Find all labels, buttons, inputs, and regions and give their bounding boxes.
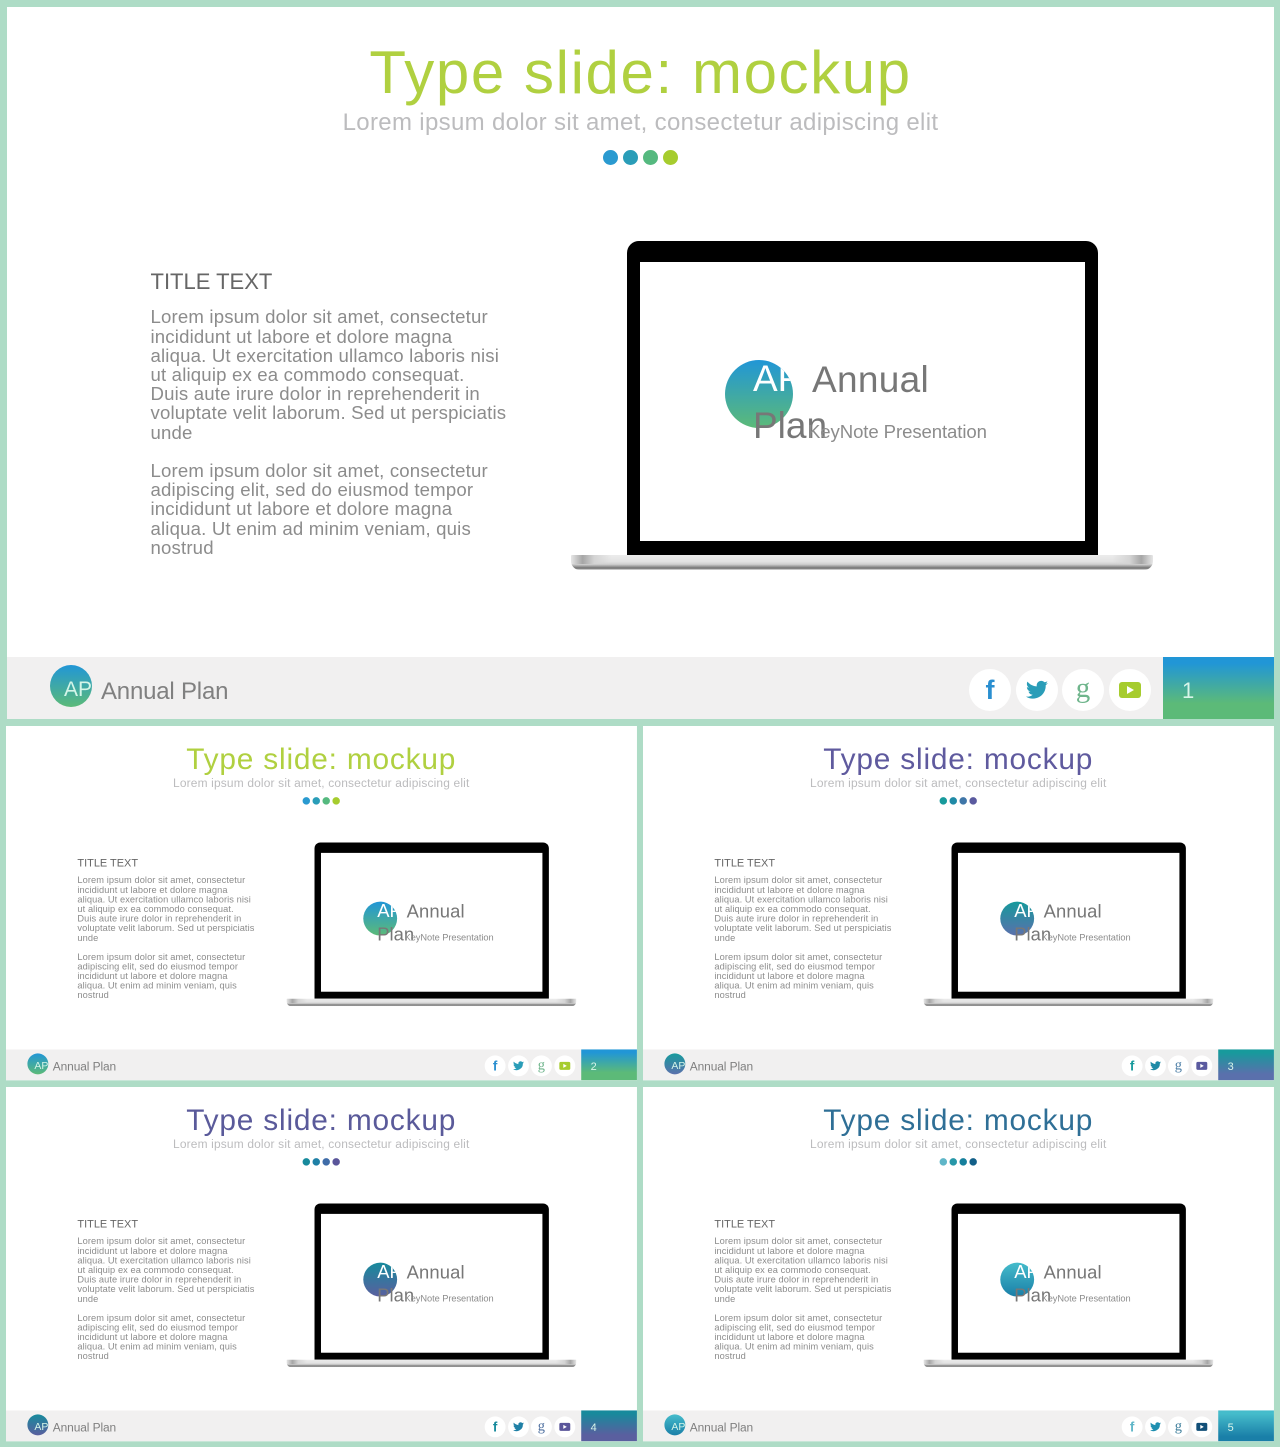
body text: ut aliquip ex ea commodo consequat. bbox=[77, 1264, 234, 1275]
dots bbox=[302, 797, 340, 805]
footer bar: 1 bbox=[1182, 678, 1194, 703]
body text: adipiscing elit, sed do eiusmod tempor bbox=[150, 479, 473, 500]
body text: aliqua. Ut enim ad minim veniam, quis bbox=[714, 1341, 874, 1351]
body text: Lorem ipsum dolor sit amet, consectetur bbox=[150, 306, 488, 327]
title: Type slide: mockup bbox=[186, 1103, 456, 1136]
body text bbox=[77, 1236, 254, 1361]
body text: Lorem ipsum dolor sit amet, consectetur bbox=[77, 951, 245, 961]
laptop mockup: KeyNote Presentation bbox=[1042, 1293, 1131, 1303]
body text: incididunt ut labore et dolore magna bbox=[150, 326, 452, 347]
body text: adipiscing elit, sed do eiusmod tempor bbox=[77, 1322, 238, 1332]
footer bar: g bbox=[1076, 672, 1090, 704]
laptop mockup: KeyNote Presentation bbox=[1042, 932, 1131, 942]
body text: unde bbox=[77, 1293, 98, 1303]
body text: aliqua. Ut exercitation ullamco laboris nisi bbox=[714, 1255, 888, 1265]
footer bar: AP bbox=[34, 1420, 48, 1432]
text heading: TITLE TEXT bbox=[77, 856, 138, 868]
body text: incididunt ut labore et dolore magna bbox=[150, 498, 452, 519]
title: Type slide: mockup bbox=[823, 742, 1093, 775]
body text: voluptate velit laborum. Sed ut perspiciatis bbox=[150, 402, 506, 423]
body text: Lorem ipsum dolor sit amet, consectetur bbox=[150, 460, 488, 481]
dots bbox=[940, 1158, 977, 1166]
footer bar: f bbox=[1130, 1058, 1134, 1073]
body text: aliqua. Ut exercitation ullamco laboris nisi bbox=[77, 1255, 251, 1265]
body text: aliqua. Ut enim ad minim veniam, quis bbox=[77, 1341, 237, 1351]
slide 2: small green mockup slide bbox=[6, 726, 637, 1080]
text heading: TITLE TEXT bbox=[714, 1217, 775, 1229]
laptop mockup: KeyNote Presentation bbox=[405, 932, 494, 942]
laptop mockup: Plan bbox=[753, 405, 827, 446]
footer bar: 4 bbox=[591, 1420, 597, 1433]
body text: Lorem ipsum dolor sit amet, consectetur bbox=[714, 1236, 882, 1246]
body text: Duis aute irure dolor in reprehenderit in bbox=[714, 913, 878, 923]
laptop mockup: Annual bbox=[812, 359, 929, 400]
body text: nostrud bbox=[77, 1350, 109, 1361]
body text: nostrud bbox=[714, 989, 746, 1000]
footer bar: Annual Plan bbox=[690, 1420, 753, 1434]
body text: adipiscing elit, sed do eiusmod tempor bbox=[714, 1322, 875, 1332]
footer bar: 3 bbox=[1228, 1059, 1234, 1072]
body text: voluptate velit laborum. Sed ut perspiciatis bbox=[714, 1283, 891, 1294]
body text: voluptate velit laborum. Sed ut perspiciatis bbox=[77, 922, 254, 933]
slide 1: large green mockup slide bbox=[7, 7, 1274, 719]
body text: adipiscing elit, sed do eiusmod tempor bbox=[714, 961, 875, 971]
footer bar bbox=[643, 1410, 1274, 1441]
laptop mockup bbox=[286, 1204, 576, 1367]
body text: incididunt ut labore et dolore magna bbox=[714, 1245, 865, 1256]
body text: ut aliquip ex ea commodo consequat. bbox=[150, 364, 464, 385]
body text: Lorem ipsum dolor sit amet, consectetur bbox=[714, 1312, 882, 1322]
body text: Duis aute irure dolor in reprehenderit in bbox=[714, 1274, 878, 1284]
body text: unde bbox=[150, 422, 193, 443]
laptop mockup: KeyNote Presentation bbox=[405, 1293, 494, 1303]
footer bar: f bbox=[493, 1419, 497, 1434]
body text: nostrud bbox=[77, 989, 109, 1000]
footer bar: g bbox=[538, 1417, 545, 1433]
footer bar bbox=[6, 1410, 637, 1441]
body text: voluptate velit laborum. Sed ut perspiciatis bbox=[714, 922, 891, 933]
footer bar: f bbox=[986, 675, 994, 705]
body text: Lorem ipsum dolor sit amet, consectetur bbox=[714, 875, 882, 885]
body text: ut aliquip ex ea commodo consequat. bbox=[714, 1264, 871, 1275]
subtitle: Lorem ipsum dolor sit amet, consectetur adipiscing elit bbox=[810, 776, 1106, 790]
body text bbox=[77, 875, 254, 1000]
subtitle: Lorem ipsum dolor sit amet, consectetur adipiscing elit bbox=[810, 1137, 1106, 1151]
body text: aliqua. Ut exercitation ullamco laboris nisi bbox=[77, 894, 251, 904]
body text: aliqua. Ut enim ad minim veniam, quis bbox=[150, 518, 471, 539]
body text: Duis aute irure dolor in reprehenderit in bbox=[77, 1274, 241, 1284]
text heading: TITLE TEXT bbox=[77, 1217, 138, 1229]
body text bbox=[714, 875, 891, 1000]
body text: incididunt ut labore et dolore magna bbox=[714, 1331, 865, 1342]
subtitle: Lorem ipsum dolor sit amet, consectetur adipiscing elit bbox=[343, 109, 938, 136]
laptop mockup: Annual bbox=[407, 1262, 465, 1282]
body text: nostrud bbox=[714, 1350, 746, 1361]
body text: ut aliquip ex ea commodo consequat. bbox=[77, 903, 234, 914]
laptop mockup: Annual bbox=[407, 901, 465, 921]
text heading: TITLE TEXT bbox=[714, 856, 775, 868]
laptop mockup bbox=[286, 842, 576, 1006]
body text bbox=[150, 306, 506, 558]
body text: Lorem ipsum dolor sit amet, consectetur bbox=[77, 875, 245, 885]
laptop mockup bbox=[924, 1204, 1214, 1367]
footer bar: AP bbox=[671, 1059, 685, 1071]
footer bar: Annual Plan bbox=[690, 1059, 753, 1073]
text heading: TITLE TEXT bbox=[150, 269, 272, 294]
laptop mockup: Annual bbox=[1044, 1262, 1102, 1282]
body text: unde bbox=[714, 1293, 735, 1303]
footer bar: Annual Plan bbox=[101, 678, 228, 705]
body text: Duis aute irure dolor in reprehenderit in bbox=[150, 383, 480, 404]
dots bbox=[940, 797, 977, 805]
footer bar: Annual Plan bbox=[53, 1420, 116, 1434]
laptop mockup: KeyNote Presentation bbox=[808, 421, 987, 442]
footer bar: f bbox=[493, 1058, 497, 1073]
subtitle: Lorem ipsum dolor sit amet, consectetur adipiscing elit bbox=[173, 1137, 469, 1151]
footer bar bbox=[7, 657, 1275, 719]
footer bar: f bbox=[1130, 1419, 1134, 1434]
slide 5: small blue mockup slide bbox=[643, 1087, 1274, 1441]
body text: ut aliquip ex ea commodo consequat. bbox=[714, 903, 871, 914]
body text: incididunt ut labore et dolore magna bbox=[77, 1331, 228, 1342]
body text: incididunt ut labore et dolore magna bbox=[77, 970, 228, 981]
footer bar: g bbox=[1175, 1417, 1182, 1433]
footer bar: g bbox=[538, 1056, 545, 1072]
title: Type slide: mockup bbox=[369, 39, 912, 106]
footer bar: AP bbox=[671, 1420, 685, 1432]
body text: Lorem ipsum dolor sit amet, consectetur bbox=[714, 951, 882, 961]
footer bar: AP bbox=[34, 1059, 48, 1071]
body text: adipiscing elit, sed do eiusmod tempor bbox=[77, 961, 238, 971]
slide 4: small indigo mockup slide bbox=[6, 1087, 637, 1441]
body text: aliqua. Ut exercitation ullamco laboris nisi bbox=[150, 345, 499, 366]
body text: incididunt ut labore et dolore magna bbox=[714, 970, 865, 981]
body text: incididunt ut labore et dolore magna bbox=[77, 884, 228, 895]
laptop mockup bbox=[571, 241, 1153, 570]
body text: Lorem ipsum dolor sit amet, consectetur bbox=[77, 1312, 245, 1322]
dots bbox=[603, 150, 678, 165]
body text: nostrud bbox=[150, 537, 214, 558]
laptop mockup: Plan bbox=[377, 924, 414, 944]
body text: incididunt ut labore et dolore magna bbox=[714, 884, 865, 895]
laptop mockup: Plan bbox=[1014, 924, 1051, 944]
dots bbox=[302, 1158, 340, 1166]
body text: aliqua. Ut enim ad minim veniam, quis bbox=[77, 980, 237, 990]
body text: aliqua. Ut exercitation ullamco laboris nisi bbox=[714, 894, 888, 904]
footer bar: Annual Plan bbox=[53, 1059, 116, 1073]
laptop mockup bbox=[924, 842, 1214, 1006]
body text: voluptate velit laborum. Sed ut perspiciatis bbox=[77, 1283, 254, 1294]
body text: incididunt ut labore et dolore magna bbox=[77, 1245, 228, 1256]
footer bar bbox=[6, 1049, 637, 1080]
title: Type slide: mockup bbox=[186, 742, 456, 775]
footer bar: 2 bbox=[591, 1059, 597, 1072]
footer bar bbox=[643, 1049, 1274, 1080]
body text: Lorem ipsum dolor sit amet, consectetur bbox=[77, 1236, 245, 1246]
laptop mockup: Plan bbox=[377, 1285, 414, 1305]
footer bar: AP bbox=[64, 678, 92, 701]
body text bbox=[714, 1236, 891, 1361]
footer bar: 5 bbox=[1228, 1420, 1234, 1433]
laptop mockup: Plan bbox=[1014, 1285, 1051, 1305]
body text: unde bbox=[77, 932, 98, 942]
subtitle: Lorem ipsum dolor sit amet, consectetur adipiscing elit bbox=[173, 776, 469, 790]
footer bar: g bbox=[1175, 1056, 1182, 1072]
body text: unde bbox=[714, 932, 735, 942]
body text: aliqua. Ut enim ad minim veniam, quis bbox=[714, 980, 874, 990]
body text: Duis aute irure dolor in reprehenderit in bbox=[77, 913, 241, 923]
slide 3: small purple mockup slide bbox=[643, 726, 1274, 1080]
laptop mockup: Annual bbox=[1044, 901, 1102, 921]
title: Type slide: mockup bbox=[823, 1103, 1093, 1136]
